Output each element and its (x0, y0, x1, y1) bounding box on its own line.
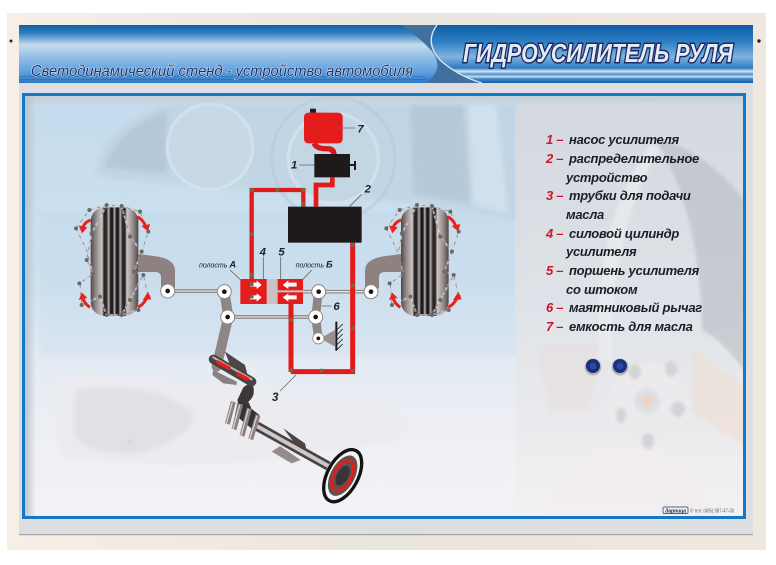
frame screws (10, 39, 761, 43)
legend item 5: поршень усилителя (569, 263, 700, 278)
inner shadow (24, 95, 744, 106)
right wheel (384, 203, 462, 317)
legend item 3: 3 – (546, 188, 563, 203)
right steering knuckle (365, 254, 401, 288)
inner plate (19, 83, 753, 535)
blue border (24, 94, 744, 518)
publisher mark (663, 507, 734, 515)
joints (161, 284, 378, 344)
steering wheel (316, 443, 370, 508)
pipe fittings (250, 188, 355, 373)
pipe 3 label: 3 (272, 392, 279, 404)
leader lines (230, 128, 362, 306)
indicator buttons (584, 358, 628, 376)
number labels: 5 (278, 247, 285, 259)
legend item 2: распределительное (568, 151, 699, 166)
header banner (19, 25, 753, 83)
steering gear (226, 382, 259, 439)
legend item 3 (546, 188, 691, 222)
legend (545, 132, 702, 334)
oil pipes (252, 177, 353, 372)
number labels: 6 (333, 301, 340, 313)
legend item 3: масла (566, 207, 604, 222)
legend item 1: насос усилителя (569, 132, 679, 147)
steering column (257, 426, 328, 466)
legend item 4 (545, 226, 679, 259)
legend item 6: маятниковый рычаг (569, 300, 702, 315)
legend backdrop (515, 102, 744, 517)
pipe 3 label (272, 375, 296, 404)
cavity labels: полость А (199, 260, 236, 270)
legend item 3: трубки для подачи (569, 188, 691, 203)
legend item 2: устройство (565, 170, 648, 185)
legend item 5: со штоком (566, 282, 638, 297)
legend item 7: 7 – (546, 319, 563, 334)
legend item 2: 2 – (545, 151, 563, 166)
reservoir (7) (304, 109, 343, 155)
pump (1) (314, 154, 355, 177)
number labels: 1 (291, 160, 297, 172)
pendulum lever bracket (320, 322, 343, 351)
number labels: 4 (259, 247, 267, 259)
background: ghost car (40, 97, 520, 464)
linkage arms (168, 291, 371, 367)
legend item 1: 1 – (546, 132, 563, 147)
power cylinder (4) with piston (5) (240, 279, 303, 304)
distributor (2) (288, 207, 362, 243)
legend item 4: усилителя (565, 244, 637, 259)
ghost steering wheel (536, 138, 744, 517)
legend item 4: силовой цилиндр (569, 226, 679, 241)
cavity labels (199, 260, 333, 270)
legend item 5: 5 – (546, 263, 563, 278)
number labels: 2 (364, 184, 372, 196)
left steering knuckle (138, 254, 175, 288)
steering column and wheel (212, 352, 370, 508)
left wheel (74, 203, 151, 317)
header subtitle: Светодинамический стенд - устройство автомобиля (31, 63, 413, 80)
legend item 4: 4 – (545, 226, 563, 241)
number labels: 7 (357, 124, 364, 136)
legend item 2 (545, 151, 699, 185)
legend item 5 (546, 263, 700, 297)
main panel with blue border (24, 94, 744, 518)
publisher mark: Зарница (665, 508, 686, 514)
publisher mark: © тел: (495) 987-47-30 (690, 508, 734, 515)
legend item 7: емкость для масла (569, 319, 693, 334)
cavity labels: полость Б (296, 260, 333, 270)
power steering diagram (74, 109, 462, 373)
upper rack (212, 352, 252, 385)
number labels (259, 124, 372, 313)
legend item 6: 6 – (546, 300, 563, 315)
